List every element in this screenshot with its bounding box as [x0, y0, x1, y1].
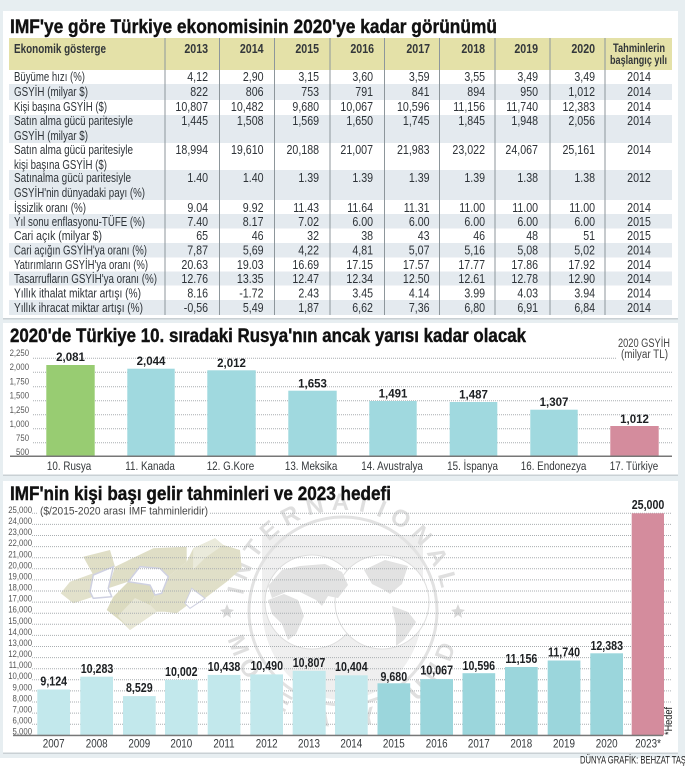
row: yatırımlar: 20.63 [181, 257, 208, 272]
y axis labels: 12,000 [8, 648, 32, 659]
bar values: 10,438 [208, 659, 241, 674]
row: büyüme hızı: 3,60 [352, 69, 373, 84]
row: yatırımlar: 17.77 [458, 257, 485, 272]
row: satın alma gücü paritesiyle GSYİH: 1,508 [237, 113, 264, 128]
row: satın alma gücü paritesiyle kişi başına: 21,007 [340, 142, 373, 157]
row: dünyadaki pay: 1.39 [464, 170, 485, 185]
y axis labels: 14,000 [8, 626, 32, 637]
row: kişi başına GSYİH [14, 99, 651, 114]
y axis labels: 1,500 [10, 390, 29, 401]
row: cari açık: 2015 [627, 228, 651, 243]
year labels: 2015 [383, 738, 405, 751]
row: dünyadaki pay: 1.40 [243, 170, 264, 185]
row: tasarruflar: 12.76 [181, 271, 208, 286]
panel: per capita income chart [3, 481, 678, 754]
row: cari açık: 48 [526, 228, 538, 243]
row: kişi başına GSYİH: 11,156 [453, 99, 485, 114]
row: cari açık: 51 [583, 228, 595, 243]
row: tasarruflar: 12.61 [458, 271, 485, 286]
row: satın alma gücü paritesiyle kişi başına [14, 142, 651, 172]
row: yatırımlar: 2014 [627, 257, 651, 272]
row: enflasyon: 6.00 [464, 214, 485, 229]
row: yatırımlar: 17.86 [511, 257, 538, 272]
row: ihracat: 6,62 [352, 300, 373, 315]
row: GSYİH: 753 [301, 84, 319, 99]
row: ihracat: 5,49 [243, 300, 264, 315]
row: satın alma gücü paritesiyle kişi başına: 24,067 [505, 142, 538, 157]
year labels: 2010 [170, 738, 192, 751]
row: işsizlik: 11.31 [404, 200, 430, 215]
chart note: ($/2015-2020 arası İMF tahminleridir) [40, 505, 208, 518]
y axis labels: 15,000 [8, 615, 32, 626]
bar values: 10,596 [463, 658, 495, 673]
category labels: 17. Türkiye [610, 460, 658, 473]
row: cari açık: 46 [473, 228, 485, 243]
table header row [9, 38, 672, 70]
row: büyüme hızı: 3,49 [517, 69, 538, 84]
row: satın alma gücü paritesiyle GSYİH [14, 113, 651, 143]
row: tasarruflar: 2014 [627, 271, 651, 286]
row: GSYİH: 806 [246, 84, 264, 99]
y axis labels: 1,000 [10, 418, 29, 429]
y axis labels: 23,000 [8, 526, 32, 537]
bar values: 10,067 [420, 662, 453, 678]
row: GSYİH [14, 84, 651, 99]
category labels: 16. Endonezya [521, 460, 587, 473]
row: kişi başına GSYİH: 10,596 [397, 99, 430, 114]
row: büyüme hızı: 2,90 [243, 69, 264, 84]
year labels: 2023* [635, 738, 662, 751]
row: kişi başına GSYİH: 10,482 [231, 99, 264, 114]
bars: forecast 2015–2020 [378, 653, 623, 735]
row: cari açık oranı: 2014 [627, 242, 651, 258]
row: büyüme hızı: 3,49 [574, 69, 595, 84]
row: ihracat [14, 300, 651, 315]
row: ithalat: 2.43 [298, 285, 319, 301]
row: satın alma gücü paritesiyle GSYİH: 2,056 [568, 113, 595, 128]
row: cari açık oranı: 7,87 [187, 242, 208, 258]
row: satın alma gücü paritesiyle GSYİH: 1,948 [511, 113, 538, 128]
y axis labels: 19,000 [8, 571, 32, 582]
bar values: 10,807 [293, 655, 326, 670]
row: işsizlik: 11.64 [347, 200, 373, 215]
row: kişi başına GSYİH: 10,807 [175, 99, 208, 114]
row: ihracat: 6,91 [517, 300, 538, 315]
y axis labels: 2,000 [10, 361, 29, 372]
y axis labels: 20,000 [8, 560, 32, 571]
row: işsizlik: 11.00 [459, 200, 485, 215]
row: ithalat: 3.45 [352, 285, 373, 301]
row: ithalat: 4.14 [409, 285, 430, 301]
category labels: 12. G.Kore [207, 460, 254, 473]
illustration: money bundles [61, 538, 242, 630]
row: satın alma gücü paritesiyle kişi başına: 23,022 [452, 142, 485, 157]
row: enflasyon [14, 214, 651, 229]
year labels: 2012 [256, 738, 278, 751]
table header row: 2017 [406, 41, 430, 56]
unit note [618, 337, 670, 361]
table header row: 2013 [184, 41, 208, 56]
row: satın alma gücü paritesiyle GSYİH: 1,569 [292, 113, 319, 128]
row: cari açık oranı: 5,69 [243, 242, 264, 258]
row: büyüme hızı: 2014 [627, 69, 651, 84]
y axis labels: 2,250 [10, 347, 29, 358]
row: tasarruflar: 12.50 [403, 271, 430, 286]
bar values: 10,283 [81, 661, 114, 676]
category labels: 13. Meksika [285, 460, 338, 473]
table header row: başlangıç yılı [610, 55, 667, 67]
row: enflasyon: 8.17 [243, 214, 264, 229]
row: büyüme hızı: 4,12 [187, 69, 208, 84]
row: ihracat: -0,56 [184, 300, 208, 315]
row: GSYİH: 1,012 [568, 84, 595, 99]
title: table heading: IMF'ye göre Türkiye ekonomisinin 2020'ye kadar görünümü [10, 16, 497, 38]
table header row: 2018 [461, 41, 485, 56]
bar values: 2,012 [217, 358, 246, 370]
year labels [43, 738, 662, 751]
row: enflasyon: Yıl sonu enflasyonu-TÜFE (%) [14, 215, 145, 229]
panel: economic outlook table [3, 11, 678, 320]
y axis labels: 22,000 [8, 537, 32, 548]
y axis labels: 24,000 [8, 515, 32, 526]
category labels: 11. Kanada [125, 460, 176, 473]
row: işsizlik: 2014 [627, 200, 651, 215]
bar values [40, 497, 665, 695]
bars: historical 2007–2014 [37, 671, 368, 735]
row: tasarruflar: 12.47 [292, 271, 319, 286]
row: ihracat: 6,80 [464, 300, 485, 315]
category labels: 14. Avustralya [361, 460, 424, 473]
row: ithalat: 3.94 [574, 285, 595, 301]
table row shading [9, 84, 672, 315]
row: ihracat: 6,84 [574, 300, 595, 315]
row: satın alma gücü paritesiyle GSYİH: 1,445 [181, 113, 208, 128]
bar values: 25,000 [632, 497, 665, 512]
row: büyüme hızı: Büyüme hızı (%) [14, 70, 85, 84]
row: dünyadaki pay: 1.38 [574, 170, 595, 185]
row: dünyadaki pay: GSYİH'nin dünyadaki payı (%) [14, 186, 145, 200]
row: cari açık oranı: 4,81 [352, 242, 373, 258]
row: işsizlik [14, 200, 651, 215]
row: yatırımlar [14, 257, 651, 272]
category labels: 10. Rusya [47, 460, 92, 473]
row: ihracat: Yıllık ihracat miktar artışı (%) [14, 301, 143, 315]
row: ithalat: -1.72 [239, 285, 264, 301]
table header row: 2016 [350, 41, 374, 56]
row: ihracat: 2014 [627, 300, 651, 315]
row: cari açık oranı: Cari açığın GSYİH'ya oranı (%) [14, 244, 147, 258]
row: tasarruflar: 12.78 [511, 271, 538, 286]
bar values: 9,680 [381, 669, 408, 684]
row: kişi başına GSYİH: 12,383 [563, 99, 595, 114]
row: satın alma gücü paritesiyle kişi başına: Satın alma gücü paritesiyle [14, 143, 133, 157]
row: satın alma gücü paritesiyle GSYİH: 1,845 [458, 113, 485, 128]
row: yatırımlar: 19.03 [237, 257, 264, 272]
row: kişi başına GSYİH: 10,067 [340, 99, 373, 114]
note: target marker: *Hedef [663, 706, 675, 735]
watermark: IMF seal: MONETARY FUND [228, 634, 454, 726]
bar values: 10,002 [165, 664, 198, 679]
row: işsizlik: İşsizlik oranı (%) [14, 201, 86, 215]
row: GSYİH: 950 [520, 84, 538, 99]
y axis labels: 17,000 [8, 593, 32, 604]
y axis labels: 1,250 [10, 404, 29, 415]
row: kişi başına GSYİH: 2014 [627, 99, 651, 114]
row: cari açık: 65 [196, 228, 208, 243]
y axis labels: 500 [16, 446, 29, 457]
row: satın alma gücü paritesiyle kişi başına: 19,610 [231, 142, 264, 157]
row: cari açık oranı: 5,02 [574, 242, 595, 258]
row: enflasyon: 7.40 [187, 214, 208, 229]
year labels: 2018 [510, 738, 532, 751]
row: cari açık oranı: 5,08 [517, 242, 538, 258]
row: ithalat: Yıllık ithalat miktar artışı (%) [14, 286, 141, 300]
unit note: (milyar TL) [621, 349, 668, 361]
bar values: 1,487 [459, 390, 488, 402]
row: büyüme hızı: 3,15 [298, 69, 319, 84]
row: dünyadaki pay: 1.38 [517, 170, 538, 185]
table header row: 2015 [295, 41, 319, 56]
y axis labels: 10,000 [8, 670, 32, 681]
bar values: 1,653 [298, 378, 327, 390]
bar values: 10,404 [335, 659, 368, 674]
row: dünyadaki pay: 2012 [627, 170, 651, 185]
y axis labels: 8,000 [13, 693, 32, 704]
row: ithalat: 8.16 [187, 285, 208, 301]
row: kişi başına GSYİH: 9,680 [292, 99, 319, 114]
row: enflasyon: 6.00 [574, 214, 595, 229]
row: tasarruflar [14, 271, 651, 286]
row: enflasyon: 6.00 [352, 214, 373, 229]
row: dünyadaki pay: 1.39 [298, 170, 319, 185]
row: cari açık: 38 [361, 228, 373, 243]
bar values: 2,044 [137, 356, 166, 368]
bar values: 11,156 [505, 651, 538, 666]
row: cari açık: 43 [418, 228, 430, 243]
year labels: 2019 [553, 738, 575, 751]
row: kişi başına GSYİH: 11,740 [506, 99, 538, 114]
row: yatırımlar: 17.92 [568, 257, 595, 272]
row: işsizlik: 9.92 [243, 200, 264, 215]
year labels: 2020 [596, 738, 618, 751]
row: tasarruflar: Tasarrufların GSYİH'ya oranı (%) [14, 272, 157, 286]
row: işsizlik: 11.00 [512, 200, 538, 215]
row: cari açık oranı [14, 242, 651, 258]
unit note: 2020 GSYİH [618, 337, 670, 350]
bar values: 1,491 [379, 388, 408, 400]
bar values: 12,383 [590, 638, 623, 653]
y axis labels [8, 504, 32, 737]
row: GSYİH: 822 [190, 84, 208, 99]
table header row: Tahminlerin [613, 43, 665, 55]
y axis labels [10, 347, 29, 457]
row: satın alma gücü paritesiyle kişi başına: 18,994 [176, 142, 208, 157]
row: GSYİH: 791 [355, 84, 373, 99]
row: GSYİH: 841 [412, 84, 430, 99]
row: dünyadaki pay [14, 170, 651, 200]
panel: GDP ranking chart [3, 323, 678, 476]
bar values: 1,307 [540, 397, 568, 409]
year labels: 2013 [298, 738, 320, 751]
row: dünyadaki pay: Satınalma gücü paritesiyle [14, 171, 131, 185]
y axis labels: 6,000 [13, 715, 32, 726]
year labels: 2007 [43, 738, 65, 751]
row: cari açık [14, 228, 651, 243]
row: ithalat [14, 285, 651, 301]
row: yatırımlar: 17.57 [403, 257, 430, 272]
year labels: 2011 [213, 738, 235, 751]
year labels: 2017 [468, 738, 490, 751]
row: yatırımlar: 17.15 [346, 257, 373, 272]
row: işsizlik: 11.43 [293, 200, 319, 215]
row: satın alma gücü paritesiyle kişi başına: 21,983 [397, 142, 430, 157]
table header row: 2020 [571, 41, 595, 56]
row: ithalat: 3.99 [464, 285, 485, 301]
row: dünyadaki pay: 1.39 [409, 170, 430, 185]
row: cari açık oranı: 5,16 [464, 242, 485, 258]
y axis labels: 21,000 [8, 549, 32, 560]
row: cari açık: Cari açık (milyar $) [14, 229, 102, 243]
row: tasarruflar: 12.90 [568, 271, 595, 286]
row: enflasyon: 7.02 [298, 214, 319, 229]
bar values: 1,012 [620, 414, 649, 426]
title: income heading: IMF'nin kişi başı gelir tahminleri ve 2023 hedefi [10, 483, 391, 505]
bar values: 10,490 [250, 658, 283, 673]
row: satın alma gücü paritesiyle GSYİH: Satın alma gücü paritesiyle [14, 114, 133, 128]
row: enflasyon: 6.00 [409, 214, 430, 229]
row: büyüme hızı: 3,55 [464, 69, 485, 84]
table header row: 2019 [514, 41, 538, 56]
y axis labels: 11,000 [9, 659, 32, 670]
row: kişi başına GSYİH: Kişi başına GSYİH ($) [14, 100, 107, 114]
watermark: IMF seal [220, 494, 465, 726]
row: enflasyon: 6.00 [517, 214, 538, 229]
bar values: 8,529 [126, 680, 153, 695]
year labels: 2009 [128, 738, 150, 751]
y axis labels: 25,000 [8, 504, 32, 515]
bar values [56, 352, 649, 426]
row: dünyadaki pay: 1.40 [187, 170, 208, 185]
year labels: 2016 [426, 738, 448, 751]
row: ihracat: 1,87 [298, 300, 319, 315]
row: GSYİH: 894 [467, 84, 485, 99]
row: cari açık oranı: 5,07 [409, 242, 430, 258]
row: ithalat: 4.03 [517, 285, 538, 301]
row: ithalat: 2014 [627, 285, 651, 301]
bars [46, 365, 659, 456]
row: büyüme hızı: 3,59 [409, 69, 430, 84]
y axis labels: 18,000 [8, 582, 32, 593]
table header row: Ekonomik gösterge [14, 42, 106, 56]
row: cari açık oranı: 4,22 [298, 242, 319, 258]
bar: 2023 target [632, 513, 664, 735]
row: cari açık: 46 [252, 228, 264, 243]
bar values: 9,124 [40, 673, 67, 689]
y axis labels: 1,750 [10, 376, 29, 387]
row: işsizlik: 9.04 [187, 200, 208, 215]
row: satın alma gücü paritesiyle kişi başına: 20,188 [287, 142, 319, 157]
y axis labels: 9,000 [13, 682, 32, 693]
y axis labels: 5,000 [13, 726, 32, 737]
row: tasarruflar: 13.35 [237, 271, 264, 286]
row: tasarruflar: 12.34 [346, 271, 373, 286]
y axis labels: 7,000 [13, 704, 32, 715]
category labels: 15. İspanya [447, 459, 499, 473]
row: satın alma gücü paritesiyle kişi başına: 25,161 [563, 142, 595, 157]
y axis labels: 16,000 [8, 604, 32, 615]
row: GSYİH: 2014 [627, 84, 651, 99]
row: yatırımlar: 16.69 [292, 257, 319, 272]
row: satın alma gücü paritesiyle GSYİH: 1,650 [346, 113, 373, 128]
row: satın alma gücü paritesiyle GSYİH: GSYİH (milyar $) [14, 129, 88, 143]
row: büyüme hızı [14, 69, 651, 84]
title: ranking heading: 2020'de Türkiye 10. sıradaki Rusya'nın ancak yarısı kadar olacak [10, 325, 526, 347]
row: satın alma gücü paritesiyle kişi başına: 2014 [627, 142, 651, 157]
row: satın alma gücü paritesiyle kişi başına: kişi başına GSYİH ($) [14, 158, 107, 172]
bar values: 2,081 [56, 352, 85, 364]
table header row: 2014 [240, 41, 264, 56]
y axis labels: 13,000 [8, 637, 32, 648]
row: ihracat: 7,36 [409, 300, 430, 315]
watermark: IMF seal: INTERNATIONAL [227, 494, 455, 594]
row: yatırımlar: Yatırımların GSYİH'ya oranı (%) [14, 258, 148, 272]
row: dünyadaki pay: 1.39 [352, 170, 373, 185]
row: GSYİH: GSYİH (milyar $) [14, 85, 88, 99]
row: işsizlik: 11.00 [569, 200, 595, 215]
row: enflasyon: 2015 [627, 214, 651, 229]
row: satın alma gücü paritesiyle GSYİH: 2014 [627, 113, 651, 128]
year labels: 2008 [86, 738, 108, 751]
year labels: 2014 [340, 738, 362, 751]
category labels [47, 459, 658, 473]
bar values: 11,740 [548, 644, 580, 660]
y axis labels: 750 [16, 432, 29, 443]
row: satın alma gücü paritesiyle GSYİH: 1,745 [403, 113, 430, 128]
row: cari açık: 32 [307, 228, 319, 243]
